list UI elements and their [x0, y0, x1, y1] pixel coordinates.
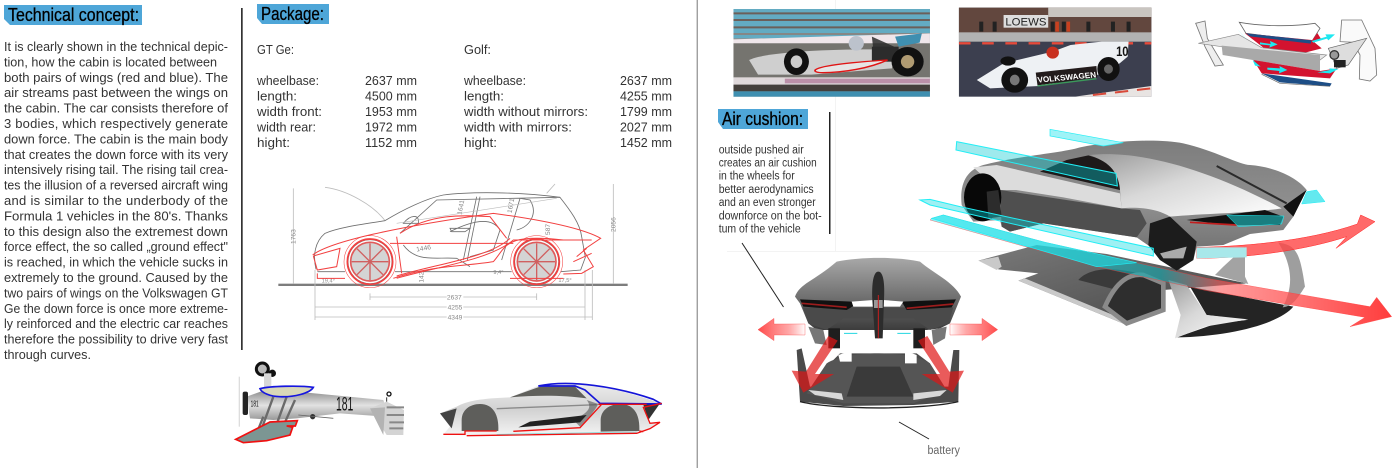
table: Golf dimensions: 1799 mm	[620, 104, 672, 119]
golf outline	[315, 193, 585, 284]
technical drawing: side blueprint: 1671	[507, 198, 516, 214]
illustration: GT Ge side with wings marked	[440, 383, 662, 436]
wheel detail	[351, 242, 556, 281]
text block: technical concept body: is reached, in which the vehicle sucks in	[4, 255, 228, 270]
heading: technical concept: Technical concept:	[8, 5, 139, 25]
car body rear view	[795, 258, 961, 348]
text block: technical concept body: tion, how the cabin is located between	[4, 54, 217, 69]
table: GT Ge dimensions: 1152 mm	[365, 135, 417, 150]
text block: technical concept body: air streams past between the wings on	[4, 85, 228, 100]
illustration: main car with airflow	[920, 129, 1392, 338]
text block: technical concept body: to this design also the extremest down	[4, 224, 228, 239]
technical drawing: side blueprint: 17,5°	[558, 278, 572, 284]
technical drawing: side blueprint: 9,4°	[493, 270, 503, 276]
text block: technical concept body: that creates the down force with its very	[4, 147, 228, 162]
technical drawing: side blueprint	[278, 184, 628, 321]
text block: air cushion description: outside pushed air	[719, 144, 804, 156]
photo: Volkswagen formula car: VOLKSWAGEN	[1037, 71, 1097, 85]
photo: race car with marked sidepod	[733, 9, 930, 97]
technical drawing: side blueprint: 2637	[447, 294, 462, 301]
table: GT Ge dimensions: GT Ge:	[257, 42, 294, 57]
text block: technical concept body: and is similar to the underbody of the	[4, 193, 228, 208]
text block: air cushion description: downforce on the bot-	[719, 210, 822, 222]
table: Golf dimensions: width without mirrors:	[463, 104, 588, 119]
technical drawing: side blueprint: 19,4°	[322, 278, 335, 284]
blue cabin outline	[538, 383, 662, 404]
illustration: biplane with wings marked: 181	[336, 395, 353, 416]
text block: technical concept body: force effect, the so called „ground effect"	[4, 239, 228, 254]
text block: technical concept body	[4, 39, 229, 362]
table: GT Ge dimensions: width rear:	[256, 120, 316, 134]
table: GT Ge dimensions: width front:	[256, 104, 322, 119]
table: Golf dimensions: width with mirrors:	[463, 120, 572, 134]
text block: technical concept body: the cabin. The car consists therefore of	[4, 101, 228, 116]
text block: technical concept body: ly reinforced and the electric car reaches	[4, 316, 228, 331]
table: Golf dimensions: wheelbase:	[463, 73, 526, 88]
red wing outline	[236, 421, 297, 443]
separated underbody	[978, 243, 1305, 338]
panel: package	[236, 4, 672, 443]
text block: technical concept body: It is clearly shown in the technical depic-	[4, 39, 228, 54]
page divider	[697, 0, 698, 468]
text block: air cushion description: and an even stronger	[719, 197, 816, 209]
blue wing outline	[260, 386, 313, 397]
text block: air cushion description	[719, 144, 822, 236]
technical drawing: side blueprint: 4255	[448, 304, 463, 311]
table: Golf dimensions: 1452 mm	[620, 135, 672, 150]
technical drawing: side blueprint: 587	[545, 224, 552, 235]
text block: technical concept body: Ge the down force is once more extreme-	[4, 301, 228, 316]
photo: Volkswagen formula car	[959, 8, 1151, 97]
illustration: biplane with wings marked: 181	[251, 400, 259, 409]
table: GT Ge dimensions: wheelbase:	[256, 73, 319, 88]
text block: technical concept body: extremely to the ground. Caused by the	[4, 270, 228, 285]
red underbody outline	[443, 403, 662, 436]
technical drawing: side blueprint: 142	[418, 271, 425, 283]
cyan flow arrows	[1237, 29, 1338, 73]
technical drawing: side blueprint: 1763	[291, 229, 298, 244]
text block: technical concept body: two pairs of wings on the Volkswagen GT	[4, 285, 228, 300]
table: GT Ge dimensions	[256, 42, 417, 150]
table: GT Ge dimensions: 1953 mm	[365, 104, 417, 119]
underbody rear view	[797, 348, 959, 408]
illustration: wing airflow detail	[1196, 20, 1377, 86]
illustration: biplane with wings marked	[236, 363, 404, 443]
table: Golf dimensions: 2027 mm	[620, 120, 672, 134]
table: GT Ge dimensions: length:	[257, 88, 297, 104]
table: GT Ge dimensions: hight:	[257, 135, 290, 150]
table: Golf dimensions: Golf:	[464, 42, 491, 57]
panel: technical concept	[4, 5, 229, 362]
car body three-quarter view	[961, 141, 1307, 271]
text block: air cushion description: creates an air cushion	[719, 158, 817, 170]
heading: air cushion: Air cushion:	[722, 109, 803, 129]
technical drawing: side blueprint: 2056	[611, 217, 618, 232]
text block: technical concept body: Formula 1 vehicles in the 80's. Thanks	[4, 208, 229, 223]
table: Golf dimensions: hight:	[464, 135, 497, 150]
text block: technical concept body: therefore the possibility to drive very fast	[4, 332, 228, 347]
table: GT Ge dimensions: 4500 mm	[365, 88, 417, 104]
cyan and red airflow arrows	[920, 129, 1392, 327]
pointer line to battery	[899, 422, 929, 439]
text block: technical concept body: both pairs of wings (red and blue). The	[4, 70, 228, 85]
heading: package: Package:	[261, 4, 324, 24]
text block: technical concept body: tes the illusion of a reversed aircraft wing	[4, 178, 228, 193]
label: battery: battery	[928, 445, 960, 457]
text block: technical concept body: intensively rising tail. The rising tail crea-	[4, 162, 228, 177]
pointer line to wheel	[742, 243, 784, 307]
text block: technical concept body: through curves.	[4, 347, 91, 362]
red GT Ge overlay	[313, 213, 601, 288]
technical drawing: side blueprint: 1446	[416, 244, 432, 254]
table: GT Ge dimensions: 2637 mm	[365, 73, 417, 88]
table: Golf dimensions: length:	[464, 88, 504, 104]
photo: Volkswagen formula car: LOEWS	[1005, 16, 1046, 28]
text block: technical concept body: 3 bodies, which respectively generate	[4, 116, 228, 131]
illustration: rear view exploded	[758, 258, 998, 408]
panel: air cushion	[718, 109, 960, 457]
technical drawing: side blueprint: 1641	[457, 199, 466, 215]
text block: technical concept body: down force. The cabin is the main body	[4, 131, 228, 146]
red airflow arrows, rear view	[758, 318, 998, 393]
table: Golf dimensions	[463, 42, 672, 150]
table: Golf dimensions: 2637 mm	[620, 73, 672, 88]
text block: air cushion description: better aerodynamics	[719, 184, 814, 196]
photo: Volkswagen formula car: 10	[1116, 43, 1129, 59]
table: GT Ge dimensions: 1972 mm	[365, 120, 417, 134]
table: Golf dimensions: 4255 mm	[620, 88, 672, 104]
text block: air cushion description: in the wheels for	[719, 171, 795, 183]
text block: air cushion description: tum of the vehicle	[719, 224, 801, 236]
technical drawing: side blueprint: 4349	[448, 314, 463, 321]
